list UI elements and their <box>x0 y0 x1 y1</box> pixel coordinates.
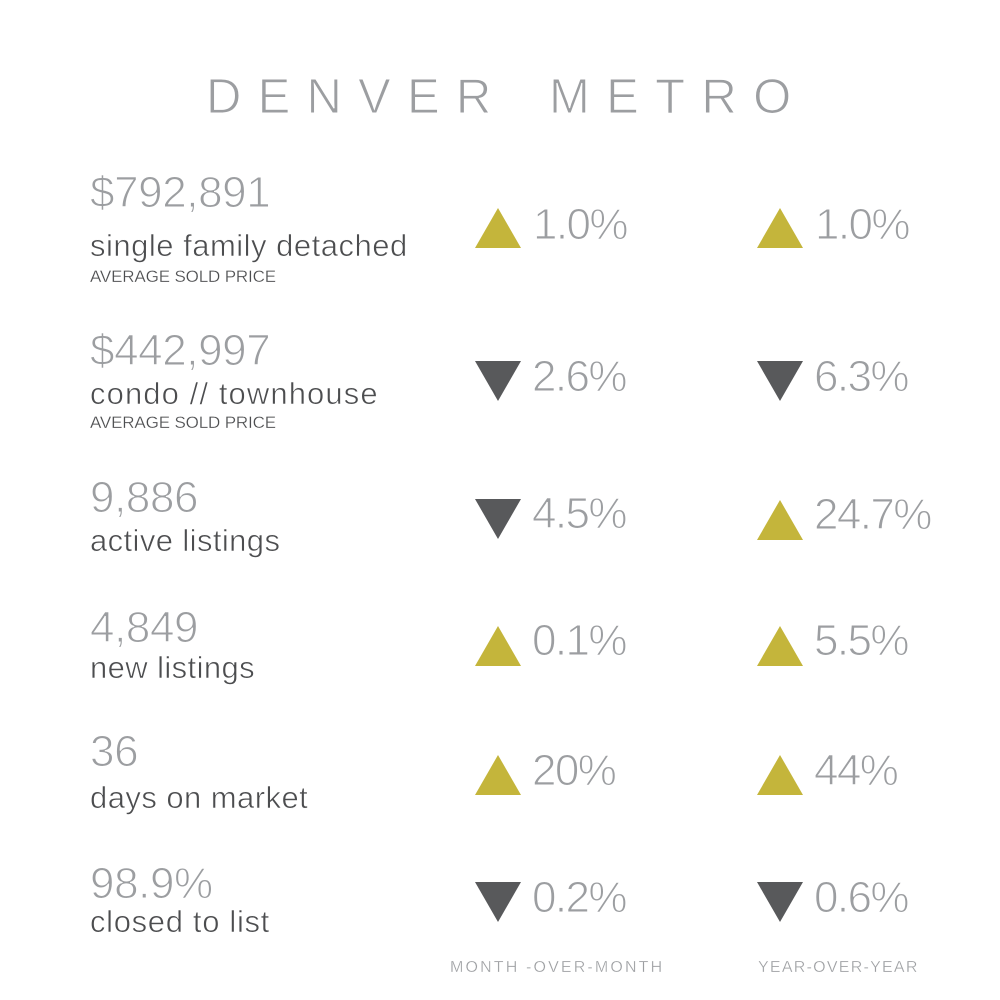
value: 98.9% <box>90 859 213 908</box>
value: 4,849 <box>90 603 198 652</box>
year change: 24.7% <box>814 490 931 539</box>
label: active listings <box>90 523 280 558</box>
icon: down triangle <box>475 361 521 401</box>
row: new listings <box>90 603 908 685</box>
label: condo // townhouse <box>90 376 379 411</box>
sublabel: AVERAGE SOLD PRICE <box>90 267 276 286</box>
label: closed to list <box>90 904 270 939</box>
value: 36 <box>90 727 138 776</box>
icon: down triangle <box>475 499 521 539</box>
label: new listings <box>90 650 255 685</box>
year change: 6.3% <box>814 352 908 401</box>
icon: up triangle <box>475 208 521 248</box>
icon: down triangle <box>757 361 803 401</box>
value: $442,997 <box>90 326 270 375</box>
month change: 20% <box>532 746 615 795</box>
icon: down triangle <box>475 882 521 922</box>
icon: down triangle <box>757 882 803 922</box>
icon: up triangle <box>475 626 521 666</box>
row: active listings <box>90 473 931 558</box>
row: single family detached <box>90 168 909 286</box>
footer: month over month: MONTH -OVER-MONTH <box>450 959 664 976</box>
month change: 4.5% <box>532 489 626 538</box>
label: days on market <box>90 780 308 815</box>
title: DENVER METRO <box>206 70 807 124</box>
icon: up triangle <box>757 755 803 795</box>
month change: 0.2% <box>532 873 626 922</box>
footer: year over year: YEAR-OVER-YEAR <box>758 959 919 976</box>
year change: 1.0% <box>815 200 909 249</box>
icon: up triangle <box>757 208 803 248</box>
label: single family detached <box>90 228 408 263</box>
month change: 1.0% <box>533 200 627 249</box>
year change: 0.6% <box>814 873 908 922</box>
year change: 44% <box>814 746 897 795</box>
icon: up triangle <box>757 500 803 540</box>
icon: up triangle <box>475 755 521 795</box>
value: $792,891 <box>90 168 270 217</box>
row: condo townhouse <box>90 326 908 432</box>
row: days on market <box>90 727 897 815</box>
sublabel: AVERAGE SOLD PRICE <box>90 413 276 432</box>
month change: 2.6% <box>532 352 626 401</box>
icon: up triangle <box>757 626 803 666</box>
row: closed to list <box>90 859 908 939</box>
value: 9,886 <box>90 473 198 522</box>
year change: 5.5% <box>814 616 908 665</box>
month change: 0.1% <box>532 616 626 665</box>
